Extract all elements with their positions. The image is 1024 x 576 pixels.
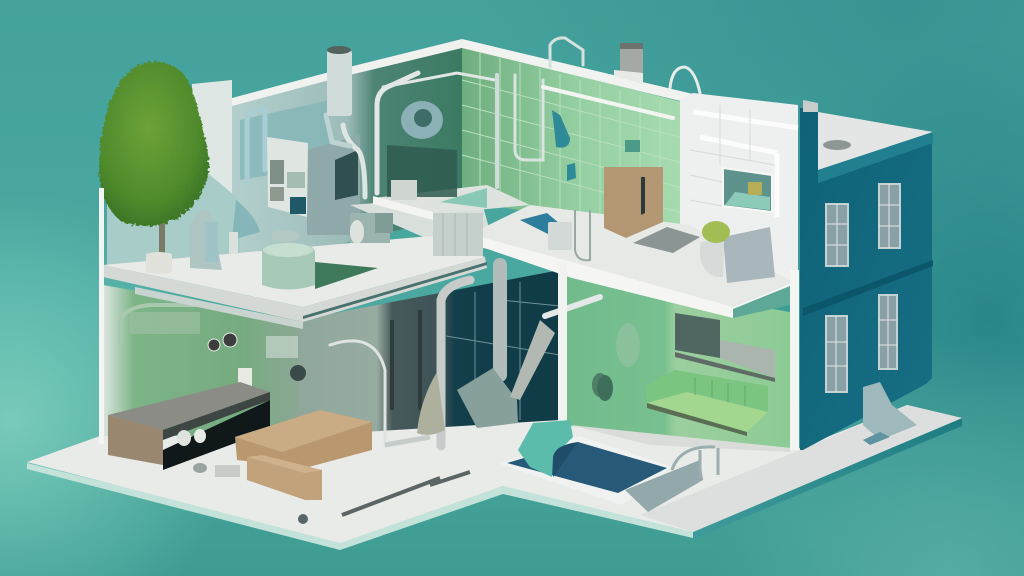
pipes (247, 38, 700, 446)
water tank (262, 230, 315, 290)
clutter on floor (193, 463, 308, 524)
tree (99, 62, 209, 274)
upper left wall (107, 39, 462, 270)
upper floor slab left (103, 195, 495, 329)
wall panel in upper room (267, 137, 308, 217)
wall picture (675, 313, 775, 382)
windows (826, 184, 900, 392)
cardboard box upstairs (604, 167, 663, 238)
right blue facade (800, 100, 933, 450)
outdoor fixture (863, 382, 917, 445)
ground slab (27, 405, 962, 550)
blue hanging hoses (552, 110, 640, 181)
gauges (208, 333, 237, 351)
workbench (108, 382, 270, 470)
roof vent (614, 43, 643, 84)
left column (99, 188, 104, 444)
mezzanine shelf (373, 185, 530, 220)
cardboard boxes downstairs (235, 410, 372, 500)
floor opening (315, 262, 378, 289)
chimney pipe (327, 46, 352, 116)
kitchen sink and counter (520, 210, 700, 260)
machinery in upper room (387, 101, 457, 200)
glass cabinets (350, 213, 483, 256)
sofa (647, 370, 768, 436)
roof (818, 112, 933, 183)
sculpture: bag, ladder and boulder (417, 320, 555, 435)
wall window (723, 168, 772, 212)
swimming pool (500, 420, 672, 505)
floor pipes (342, 437, 470, 515)
center columns (558, 262, 799, 450)
planter (700, 221, 775, 283)
lower left room wall (103, 285, 300, 436)
lower right room: green wall and sofa (562, 272, 790, 452)
upstairs fixtures near tank (190, 210, 238, 270)
pool rail (625, 447, 718, 512)
lower center room wall (290, 270, 560, 436)
back wall: green tiles (462, 39, 693, 240)
upper floor slab right (470, 205, 793, 318)
white brick wall section (680, 93, 798, 290)
